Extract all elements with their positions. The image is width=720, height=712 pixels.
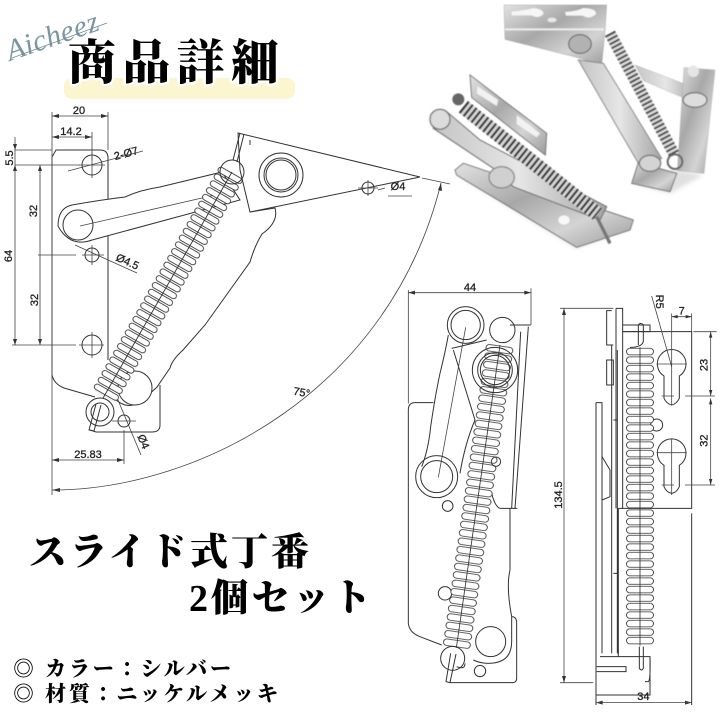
spec list: color and material (13, 657, 278, 706)
side view dimensions: 23 (698, 359, 710, 371)
title highlight band (64, 78, 295, 99)
shadow (457, 170, 703, 248)
swing angle arc (52, 178, 450, 490)
dimension labels: 14.2 (60, 126, 82, 138)
dimension lines: width and height (12, 112, 143, 495)
product photo: two silver hinges (430, 5, 715, 248)
mounting holes (79, 152, 105, 358)
side view dimensions: 7 (679, 305, 685, 317)
plate outline (52, 150, 108, 397)
dimension labels: 32 (28, 205, 40, 217)
side view dimensions: R5 (653, 295, 665, 309)
dimension labels: Ø4.5 (114, 252, 141, 273)
hinge: upper right (504, 5, 715, 192)
dimension labels: 5.5 (4, 150, 16, 166)
front view body (408, 307, 531, 683)
dimension labels: Ø4 (134, 433, 151, 451)
width dimension 44: 44 (464, 282, 476, 294)
upper triangular bracket (233, 133, 420, 212)
dimension labels: 20 (73, 105, 85, 117)
lower link plate (90, 170, 276, 432)
side plate (677, 68, 715, 173)
technical drawing: front and side views (408, 282, 717, 705)
side view dimensions: 32 (698, 435, 710, 447)
spring hooks (86, 160, 244, 431)
keyhole slots (657, 313, 687, 495)
swing arm (58, 172, 240, 242)
pivot and small hole (112, 371, 152, 427)
back arm (635, 65, 697, 103)
spec list: color and material: ◎ (13, 682, 34, 706)
spring (610, 33, 674, 154)
spring (463, 107, 597, 214)
front view spring (441, 317, 518, 683)
technical drawing: open hinge with dimensions (3, 105, 450, 495)
side view dimensions (596, 295, 717, 705)
height dimension 134.5 (553, 308, 613, 683)
spec list: color and material: ◎ (13, 657, 34, 681)
side view body (596, 308, 692, 705)
base plate (455, 163, 633, 247)
arm (432, 112, 607, 220)
front arm (578, 60, 662, 171)
heading: slide hinge, set of two: 2個セット (189, 578, 371, 620)
dimension labels: Ø4 (391, 181, 405, 193)
dimension labels: 2-Ø7 (113, 145, 140, 163)
tension spring (91, 165, 244, 405)
spec list: color and material: 材質：ニッケルメッキ (45, 682, 278, 706)
dimension labels: 75° (292, 386, 311, 400)
upright plate (470, 75, 547, 155)
foot (632, 163, 677, 192)
dimension labels: 25.83 (74, 449, 102, 461)
side view dimensions: 34 (637, 691, 649, 703)
dimension labels (3, 105, 405, 461)
dimension labels: 32 (29, 294, 41, 306)
side view spring (626, 347, 654, 646)
mount plate (504, 5, 607, 65)
width dimension 44 (408, 282, 531, 403)
hinge: lower left (430, 75, 633, 247)
heading: slide hinge, set of two: スライド式丁番 (29, 532, 309, 574)
height dimension 134.5: 134.5 (553, 481, 565, 509)
brand logo: Aicheez (0, 5, 103, 68)
heading: slide hinge, set of two (29, 532, 371, 620)
dimension labels: 64 (3, 250, 15, 262)
title: product details: 商品詳細 (68, 37, 279, 90)
spec list: color and material: カラー：シルバー (45, 657, 231, 681)
